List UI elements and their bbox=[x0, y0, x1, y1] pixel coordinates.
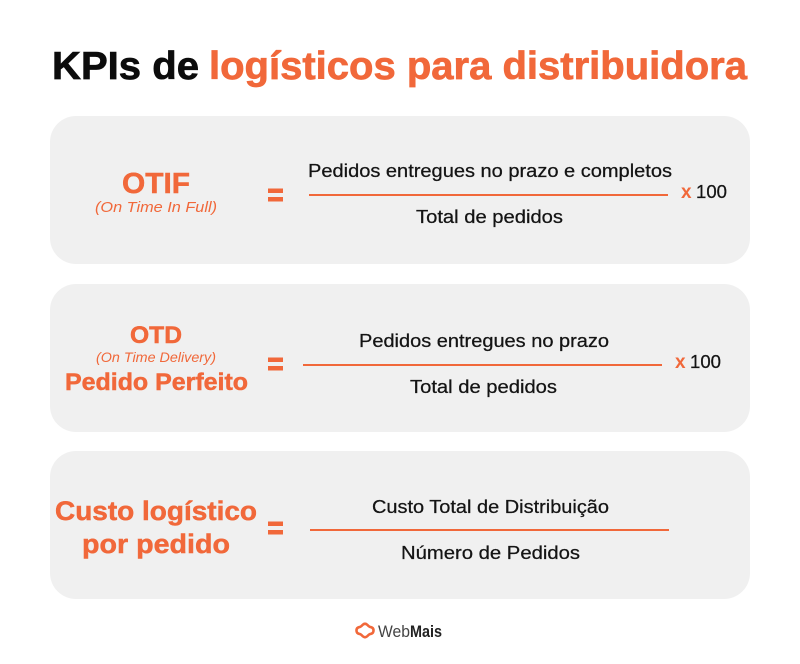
custo denominator: Número de Pedidos bbox=[401, 543, 580, 563]
title: KPIs de bbox=[52, 45, 199, 88]
title: logísticos para distribuidora bbox=[209, 45, 747, 88]
OTIF label bbox=[95, 168, 217, 216]
custo fraction line bbox=[310, 529, 669, 531]
custo numerator: Custo Total de Distribuição bbox=[372, 497, 609, 517]
equals sign bbox=[268, 358, 283, 370]
OTD label: Pedido Perfeito bbox=[65, 369, 248, 396]
OTIF fraction line bbox=[309, 194, 668, 196]
panel: custo logístico bbox=[50, 451, 750, 599]
OTIF multiplier: 100 bbox=[696, 182, 727, 202]
custo label: Custo logístico bbox=[55, 496, 257, 526]
OTIF label: OTIF bbox=[122, 168, 190, 200]
OTIF multiplier bbox=[681, 182, 727, 203]
OTIF label: (On Time In Full) bbox=[95, 199, 217, 216]
icon: logo mark bbox=[356, 624, 374, 637]
OTD multiplier bbox=[675, 352, 721, 373]
OTD label: OTD bbox=[130, 322, 182, 349]
logo: WebMais bbox=[356, 622, 442, 641]
OTD multiplier: 100 bbox=[690, 352, 721, 372]
logo: WebMais: Mais bbox=[410, 622, 442, 641]
custo label bbox=[55, 496, 257, 559]
OTIF numerator: Pedidos entregues no prazo e completos bbox=[308, 161, 672, 181]
OTD numerator: Pedidos entregues no prazo bbox=[359, 331, 609, 351]
OTIF multiplier: x bbox=[681, 182, 692, 203]
equals sign bbox=[268, 188, 283, 202]
OTD label: (On Time Delivery) bbox=[96, 350, 216, 365]
OTD label bbox=[65, 322, 248, 396]
OTD fraction line bbox=[303, 364, 662, 366]
panel: OTIF bbox=[50, 116, 750, 264]
OTD denominator: Total de pedidos bbox=[410, 377, 557, 397]
OTIF denominator: Total de pedidos bbox=[416, 207, 563, 227]
logo: WebMais: Web bbox=[378, 622, 410, 641]
equals sign bbox=[268, 522, 283, 534]
panel: OTD bbox=[50, 284, 750, 432]
OTD multiplier: x bbox=[675, 352, 686, 373]
custo label: por pedido bbox=[82, 529, 230, 559]
